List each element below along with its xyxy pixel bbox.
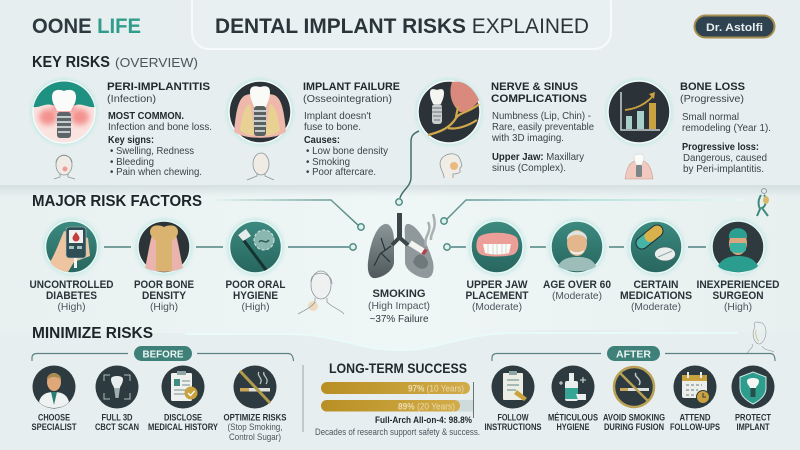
text: peri-implantitis: PERI-IMPLANTITIS xyxy=(107,81,210,93)
risk factor: medications xyxy=(620,219,692,313)
text: bone loss: Progressive loss: xyxy=(682,142,759,153)
section: before xyxy=(32,346,294,442)
risk factor: oral hygiene xyxy=(226,219,286,313)
text: nerve and sinus: Upper Jaw: Maxillary xyxy=(492,152,585,163)
step: optimize risks xyxy=(224,366,287,442)
heading: key risks: KEY RISKS xyxy=(32,54,110,71)
icon: older man xyxy=(549,219,605,275)
text: nerve and sinus: Rare, easily preventable xyxy=(492,122,594,133)
text: implant failure xyxy=(303,81,400,178)
step: choose specialist: SPECIALIST xyxy=(32,422,77,433)
icon: denture xyxy=(469,219,525,275)
label: bone density: DENSITY xyxy=(142,290,187,302)
step: protect implant: PROTECT xyxy=(735,412,771,424)
text: implant failure: • Low bone density xyxy=(306,146,389,157)
step: avoid smoking: DURING FUSION xyxy=(604,422,664,433)
illustration: head outline xyxy=(747,322,774,354)
text: implant failure: • Poor aftercare. xyxy=(306,167,376,178)
badge: before xyxy=(134,346,192,361)
panel: peri-implantitis xyxy=(31,79,212,179)
label: bone density xyxy=(134,279,194,313)
label: oral hygiene xyxy=(226,279,286,313)
section: after xyxy=(484,346,775,433)
text: research note: Decades of research support safety & success. xyxy=(315,427,480,437)
icon: head profile xyxy=(440,154,462,178)
heading: major risk factors: MAJOR RISK FACTORS xyxy=(32,193,202,210)
text: implant failure: IMPLANT FAILURE xyxy=(303,81,400,93)
title panel xyxy=(192,0,611,49)
text: peri-implantitis xyxy=(107,81,212,178)
badge: after xyxy=(607,346,660,361)
label: upper jaw xyxy=(466,279,529,313)
heading: key risks xyxy=(32,54,198,71)
step: optimize risks: (Stop Smoking, xyxy=(228,422,282,432)
text: nerve and sinus: with 3D imaging. xyxy=(491,133,564,144)
title: DENTAL IMPLANT RISKS EXPLAINED xyxy=(215,15,589,38)
step: disclose history xyxy=(148,366,218,433)
text: nerve and sinus: Numbness (Lip, Chin) - xyxy=(492,111,591,122)
text: peri-implantitis: (Infection) xyxy=(107,94,156,105)
bar: 10 years xyxy=(321,382,470,394)
panel: nerve and sinus xyxy=(416,79,594,178)
step: disclose history: MEDICAL HISTORY xyxy=(148,422,218,433)
step: follow instructions xyxy=(484,366,542,433)
label: bone density: POOR BONE xyxy=(134,279,194,291)
icon: pills xyxy=(628,219,684,275)
label: diabetes: UNCONTROLLED xyxy=(30,279,114,291)
step: cbct scan: CBCT SCAN xyxy=(95,422,139,433)
label: surgeon: (High) xyxy=(724,302,752,313)
text: bone loss xyxy=(680,81,771,175)
label: diabetes xyxy=(30,279,114,313)
heading: key risks: (OVERVIEW) xyxy=(115,55,198,70)
label: diabetes: DIABETES xyxy=(46,290,97,302)
bracket: after xyxy=(492,354,775,361)
text: bone loss: remodeling (Year 1). xyxy=(682,123,771,134)
step: meticulous hygiene: HYGIENE xyxy=(556,422,590,433)
text: full-arch: Full-Arch All-on-4: 98.8% xyxy=(375,415,472,426)
text: nerve and sinus: sinus (Complex). xyxy=(492,163,566,174)
text: peri-implantitis: MOST COMMON. xyxy=(108,111,184,122)
icon: surgeon xyxy=(710,219,766,275)
text: nerve and sinus: COMPLICATIONS xyxy=(491,93,587,105)
icon: nerve and sinus xyxy=(416,79,482,145)
step: cbct scan xyxy=(95,366,139,433)
label: diabetes: (High) xyxy=(58,302,86,313)
step: cbct scan: FULL 3D xyxy=(102,412,133,424)
text: bone loss: (Progressive) xyxy=(680,94,744,105)
step: avoid smoking: AVOID SMOKING xyxy=(603,412,665,424)
text: bone loss: Small normal xyxy=(682,112,739,123)
panel: long-term success xyxy=(303,361,480,437)
text: implant failure: • Smoking xyxy=(306,157,350,168)
illustration: woman portrait xyxy=(298,271,344,314)
panel: implant failure xyxy=(227,79,400,180)
icon: progressive chart xyxy=(606,79,672,145)
icon: infected implant xyxy=(31,79,97,145)
label: age xyxy=(543,279,611,302)
icon: toothbrush and germ xyxy=(228,219,284,275)
label: smoking: ~37% Failure xyxy=(370,314,429,325)
text: bone loss: by Peri-implantitis. xyxy=(683,164,764,175)
label: age: AGE OVER 60 xyxy=(543,279,611,291)
text: peri-implantitis: • Swelling, Redness xyxy=(110,146,194,157)
risk factor: age xyxy=(543,219,611,302)
step: choose specialist xyxy=(32,366,77,433)
text: implant failure: Causes: xyxy=(304,135,340,146)
step: meticulous hygiene xyxy=(548,366,598,433)
icon: bone xyxy=(136,219,192,275)
label: surgeon xyxy=(696,279,780,313)
label: oral hygiene: POOR ORAL xyxy=(226,279,286,291)
text: bone loss: Dangerous, caused xyxy=(683,153,767,164)
label: smoking xyxy=(368,288,430,325)
label: upper jaw: UPPER JAW xyxy=(466,279,528,291)
label: medications: CERTAIN xyxy=(634,279,679,291)
badge: before: BEFORE xyxy=(142,348,184,360)
step: optimize risks: Control Sugar) xyxy=(229,432,281,442)
risk factor: surgeon xyxy=(696,219,780,313)
heading: minimize risks: MINIMIZE RISKS xyxy=(32,325,153,342)
label: age: (Moderate) xyxy=(552,291,602,302)
step: optimize risks: OPTIMIZE RISKS xyxy=(224,412,287,424)
wave divider xyxy=(185,333,738,350)
step: attend follow-ups: ATTEND xyxy=(680,412,711,424)
step: protect implant: IMPLANT xyxy=(736,422,770,433)
text: peri-implantitis: • Bleeding xyxy=(110,157,154,168)
step: attend follow-ups: FOLLOW-UPS xyxy=(670,422,720,433)
band top shade xyxy=(0,185,800,197)
text: implant failure: Implant doesn't xyxy=(304,111,371,122)
bracket: before xyxy=(32,354,294,361)
logo: OONE LIFE xyxy=(32,15,141,38)
label: smoking: (High Impact) xyxy=(368,301,430,312)
risk factor: diabetes xyxy=(30,219,114,313)
step: protect implant xyxy=(732,366,774,433)
step: follow instructions: FOLLOW xyxy=(498,412,529,424)
author badge: Dr. Astolfi xyxy=(706,22,763,34)
bar: 20 years: 89% (20 Years) xyxy=(398,402,455,412)
label: surgeon: SURGEON xyxy=(712,290,764,302)
text: nerve and sinus: NERVE & SINUS xyxy=(491,81,578,93)
illustration: walking figure xyxy=(757,188,769,216)
text: nerve and sinus xyxy=(491,81,594,174)
step: choose specialist: CHOOSE xyxy=(38,412,70,424)
label: medications: (Moderate) xyxy=(631,302,681,313)
label: oral hygiene: HYGIENE xyxy=(233,290,278,302)
icon: glucose meter xyxy=(44,219,100,275)
label: surgeon: INEXPERIENCED xyxy=(696,279,780,291)
text: implant failure: (Osseointegration) xyxy=(303,94,392,105)
icon: implant in bone xyxy=(227,79,293,145)
risk factor: upper jaw xyxy=(466,219,529,313)
step: disclose history: DISCLOSE xyxy=(164,412,202,424)
panel: bone loss xyxy=(606,79,771,179)
text: bone loss: BONE LOSS xyxy=(680,81,745,93)
label: medications xyxy=(620,279,692,313)
label: medications: MEDICATIONS xyxy=(620,290,692,302)
central factor: smoking xyxy=(368,213,435,325)
text: implant failure: fuse to bone. xyxy=(304,122,361,133)
step: attend follow-ups xyxy=(670,366,720,433)
icon: face with redness xyxy=(54,155,75,179)
icon: small implant xyxy=(625,154,653,179)
icon: lungs with cigarette xyxy=(368,213,435,278)
step: follow instructions: INSTRUCTIONS xyxy=(484,422,542,433)
step: meticulous hygiene: MÉTICULOUS xyxy=(548,412,598,424)
step: avoid smoking xyxy=(603,367,665,433)
text: peri-implantitis: Key signs: xyxy=(108,135,154,146)
label: upper jaw: (Moderate) xyxy=(472,302,522,313)
text: peri-implantitis: • Pain when chewing. xyxy=(110,167,202,178)
label: oral hygiene: (High) xyxy=(242,302,270,313)
text: peri-implantitis: Infection and bone loss. xyxy=(108,122,212,133)
bar: 20 years xyxy=(321,400,473,412)
badge: after: AFTER xyxy=(616,348,651,360)
bar: 10 years: 97% (10 Years) xyxy=(408,384,464,394)
label: smoking: SMOKING xyxy=(372,288,426,300)
author badge xyxy=(694,16,774,38)
risk factor: bone density xyxy=(134,219,194,313)
label: upper jaw: PLACEMENT xyxy=(466,290,529,302)
connectors to smoking xyxy=(104,131,745,250)
risk factors background band xyxy=(0,185,800,350)
label: bone density: (High) xyxy=(150,302,178,313)
heading: long-term success: LONG-TERM SUCCESS xyxy=(329,361,467,376)
icon: male face xyxy=(247,153,274,180)
